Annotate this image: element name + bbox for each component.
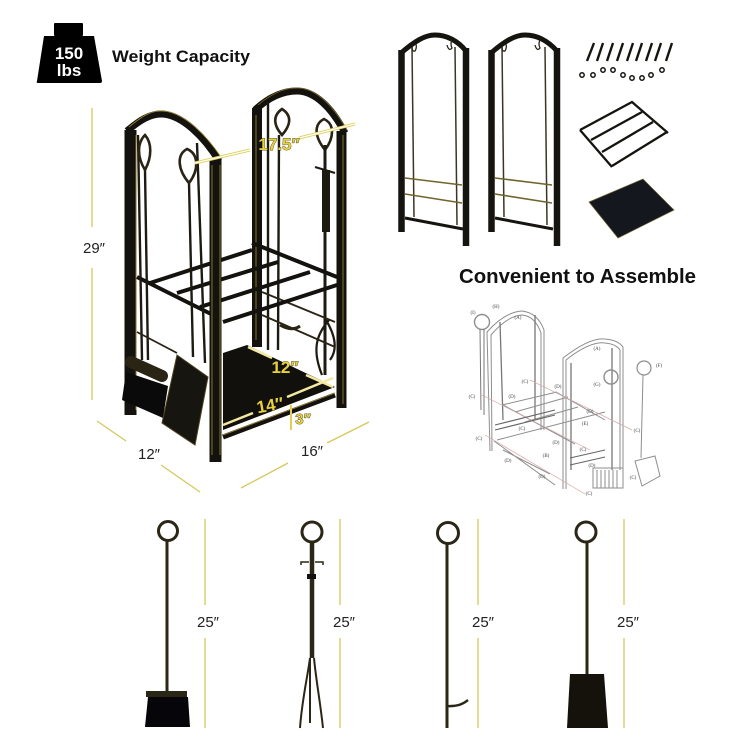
assembly part labels: (D) — [555, 385, 562, 390]
assembly part labels — [469, 305, 662, 497]
main log rack illustration — [122, 88, 347, 462]
assembly part labels: (A) — [515, 316, 522, 321]
dimension: shovel 25 inch: 25″ — [617, 614, 640, 631]
assembly part labels: (G) — [594, 383, 601, 388]
dimension: 12 inch depth — [97, 421, 200, 492]
dimension: poker 25 inch: 25″ — [472, 614, 495, 631]
assembly part labels: (C) — [580, 448, 587, 453]
assembly part labels: (D) — [509, 395, 516, 400]
tool: tongs — [300, 522, 323, 728]
assembly part labels: (I) — [470, 311, 476, 316]
assembly part labels: (A) — [594, 347, 601, 352]
assembly part labels: (C) — [586, 492, 593, 497]
frame one — [401, 35, 466, 246]
lower rear bars — [262, 292, 335, 347]
dimension: 12 inch shelf depth: 12″ — [271, 358, 299, 377]
assembly part labels: (H) — [493, 305, 500, 310]
assembly diagram — [469, 305, 662, 497]
assembly part labels: (E) — [582, 422, 589, 427]
assembly part labels: (D) — [553, 441, 560, 446]
assembly part labels: (D) — [587, 410, 594, 415]
icon: 150 lbs weight: 150 — [55, 44, 83, 63]
parts: base board — [589, 179, 674, 238]
dimension: 12 inch depth: 12″ — [138, 446, 161, 463]
dimension: 14 inch shelf width: 14″ — [255, 394, 285, 417]
heading: convenient to assemble: Convenient to Assemble — [459, 266, 696, 288]
dimension: brush 25 inch: 25″ — [197, 614, 220, 631]
brush in rack — [122, 362, 168, 418]
icon: 150 lbs weight — [37, 23, 102, 83]
assembly part labels: (C) — [519, 427, 526, 432]
dimension: 14 inch shelf width — [223, 378, 333, 425]
front left frame — [127, 111, 221, 462]
dimension: 16 inch width: 16″ — [301, 443, 324, 460]
upper rack bars — [137, 243, 337, 322]
assembly part labels: (C) — [634, 429, 641, 434]
parts: screws and nuts — [580, 43, 672, 80]
assembly part labels: (D) — [505, 459, 512, 464]
assembly part labels: (C) — [630, 476, 637, 481]
assembly part labels: (D) — [539, 475, 546, 480]
dimension: 12 inch shelf depth — [248, 347, 333, 387]
dimension: tongs 25 inch: 25″ — [333, 614, 356, 631]
dustpan in rack — [162, 355, 208, 445]
rear right frame — [255, 88, 347, 408]
dimension: 16 inch width — [241, 422, 369, 488]
parts: rack grid — [580, 102, 668, 167]
icon: 150 lbs weight: lbs — [57, 61, 81, 80]
assembly part labels: (D) — [589, 464, 596, 469]
bottom shelf — [223, 345, 335, 430]
assembly part labels: (F) — [656, 364, 662, 369]
dimension: 17.5 inch span: 17.5″ — [258, 135, 300, 154]
heading: weight capacity: Weight Capacity — [112, 47, 251, 66]
assembly part labels: (C) — [522, 380, 529, 385]
tool: shovel — [567, 522, 608, 728]
assembly part labels: (B) — [543, 454, 550, 459]
dimension: 3 inch clearance — [291, 405, 311, 430]
assembly part labels: (C) — [476, 437, 483, 442]
tool: poker — [438, 522, 468, 728]
dimension: 29 inch height: 29″ — [83, 240, 106, 257]
frame two — [491, 35, 557, 246]
tool: brush — [145, 522, 190, 727]
parts: side frames — [401, 35, 557, 246]
dimension: 17.5 inch span — [195, 124, 355, 163]
dimension: 3 inch clearance: 3″ — [295, 411, 311, 428]
assembly part labels: (C) — [469, 395, 476, 400]
